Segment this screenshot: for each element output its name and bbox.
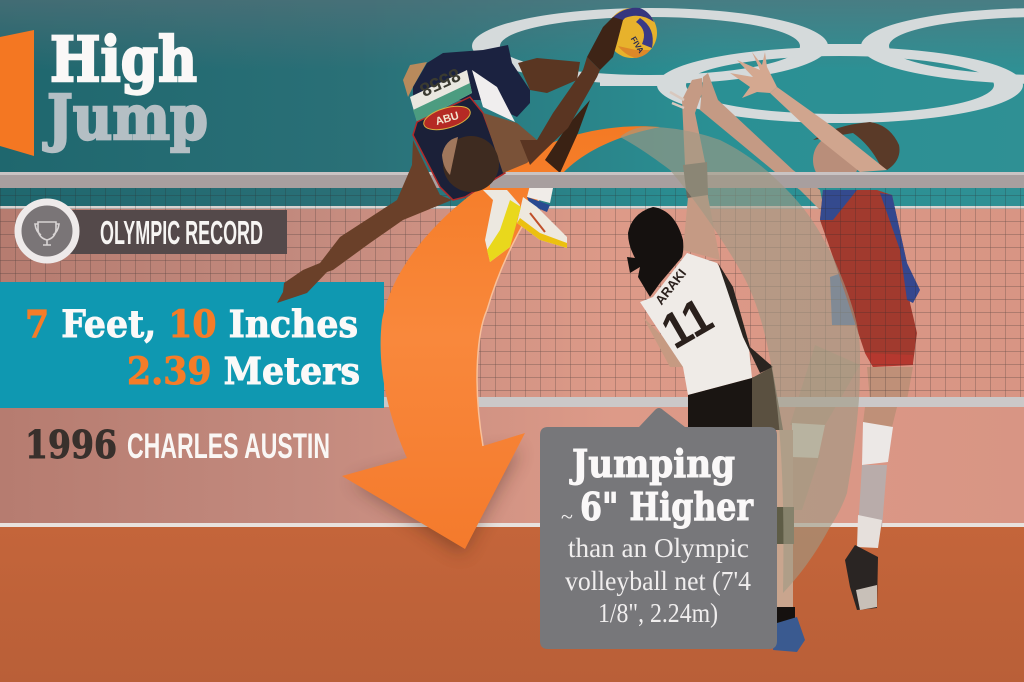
high jumper body: 8558 <box>416 63 463 100</box>
record panel: 7 Feet, 10 Inches <box>25 302 358 346</box>
title: Jump <box>43 81 208 154</box>
orange curved arrow <box>342 126 660 554</box>
blocker: white jersey player: 11 <box>652 287 722 360</box>
record panel: 2.39 Meters <box>127 349 360 393</box>
blocker: white jersey player: ARAKI <box>652 266 689 308</box>
record panel <box>0 282 384 408</box>
title orange tab <box>0 30 34 156</box>
olympic record label: OLYMPIC RECORD <box>100 214 263 251</box>
record holder <box>25 422 330 467</box>
title: High <box>50 23 197 96</box>
high jumper body: ABU <box>434 110 460 128</box>
translucent height overlay <box>620 127 860 593</box>
callout: 1/8", 2.24m) <box>598 598 718 628</box>
volleyball net <box>0 172 1024 407</box>
icon: volleyball: FIVA <box>629 35 646 55</box>
jumper legs <box>483 100 590 262</box>
callout <box>540 408 777 649</box>
icon: trophy badge <box>18 202 76 260</box>
callout: volleyball net (7'4 <box>565 566 751 596</box>
title <box>43 23 208 154</box>
callout: ~ <box>561 504 573 529</box>
callout: 6" Higher <box>580 484 754 529</box>
blocker: red jersey player <box>700 52 920 610</box>
olympic rings on floor <box>472 8 1024 123</box>
net top rail in front of legs <box>490 172 650 188</box>
icon: volleyball <box>607 8 657 58</box>
callout: than an Olympic <box>568 533 749 563</box>
record holder: CHARLES AUSTIN <box>127 427 330 466</box>
record holder: 1996 <box>25 422 117 467</box>
olympic record label <box>60 210 287 254</box>
high jumper body <box>277 17 623 303</box>
callout: Jumping <box>569 441 735 486</box>
blocker: white jersey player <box>627 78 805 652</box>
